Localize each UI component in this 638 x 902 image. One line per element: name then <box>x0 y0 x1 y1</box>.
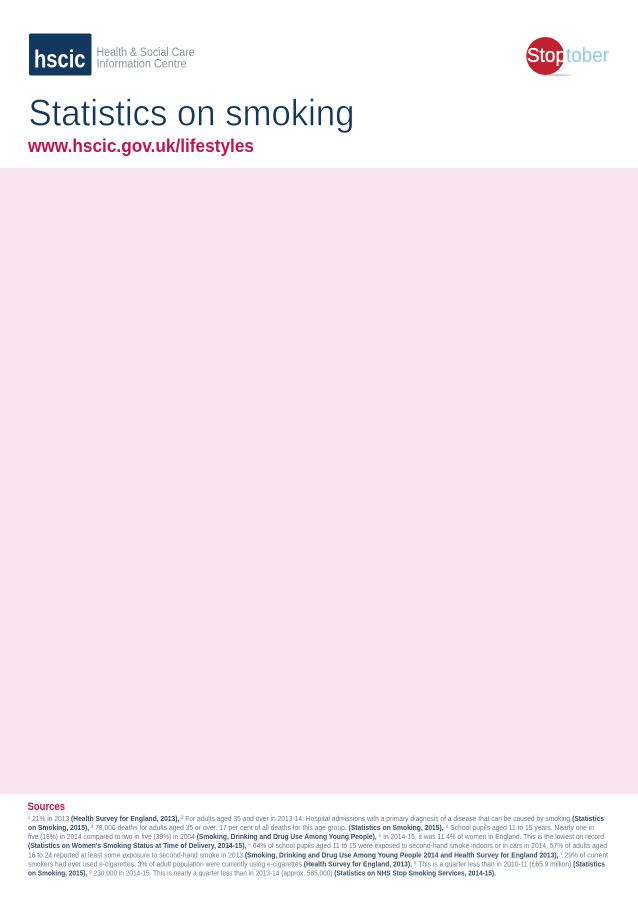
text block: sources notes: 16 to 24 reported at least some exposure to second-hand smoke in 2013 (Smoking, Drinking and Drug Use Among Young People 2014 and Health Survey for England 2013), ⁷ 29% of current <box>28 850 609 860</box>
text block: sources notes: on Smoking, 2015), ³ 78,000 deaths for adults aged 35 or over. 17 per cent of all deaths for this age group. (Statistics on Smoking, 2015), ⁴ School pupils aged 11 to 15 years. Nearly one in <box>28 823 594 832</box>
text block: sources notes: (Statistics on Women's Smoking Status at Time of Delivery, 2014-15), ⁶ 64% of school pupils aged 11 to 15 were exposed to second-hand smoke indoors or in cars in 2014. 57% of adults aged <box>28 841 607 850</box>
text block: sources notes: smokers had ever used e-cigarettes, 3% of adult population were currently using e-cigarettes (Health Survey for England, 2013), ⁸ This is a quarter less than in 2010-11 (£65.9 million) (Statistics <box>28 860 605 868</box>
icon: Stoptober logo: Stop <box>527 45 566 67</box>
icon: Stoptober logo: tober <box>566 45 609 67</box>
text block: sources notes: on Smoking, 2015), ⁹ 230,000 in 2014-15. This is nearly a quarter less than in 2013-14 (approx. 585,000) (Statistics on NHS Stop Smoking Services, 2014-15). <box>28 868 496 878</box>
title: Statistics on smoking <box>28 92 354 134</box>
panel: empty pink content area <box>0 168 638 794</box>
text block: sources notes: ¹ 21% in 2013 (Health Survey for England, 2013), ² For adults aged 35 and over in 2013-14. Hospital admissions with a primary diagnosis of a disease that can be caused by smoking (Statistics <box>28 814 604 823</box>
website link: www.hscic.gov.uk/lifestyles <box>27 135 254 156</box>
text block: sources notes <box>28 814 609 878</box>
icon: hscic logo: Health & Social Care <box>96 47 194 59</box>
text block: sources notes: five (18%) in 2014 compared to two in five (39%) in 2004 (Smoking, Drinking and Drug Use Among Young People), ⁵ In 2014-15, it was 11.4% of women in England. This is the lowest on record <box>28 832 604 841</box>
sources heading: Sources <box>28 801 65 813</box>
icon: hscic logo: Information Centre <box>96 58 186 70</box>
icon: Stoptober logo <box>526 37 609 76</box>
icon: hscic logo: hscic <box>34 46 86 74</box>
icon: hscic logo <box>29 34 194 76</box>
